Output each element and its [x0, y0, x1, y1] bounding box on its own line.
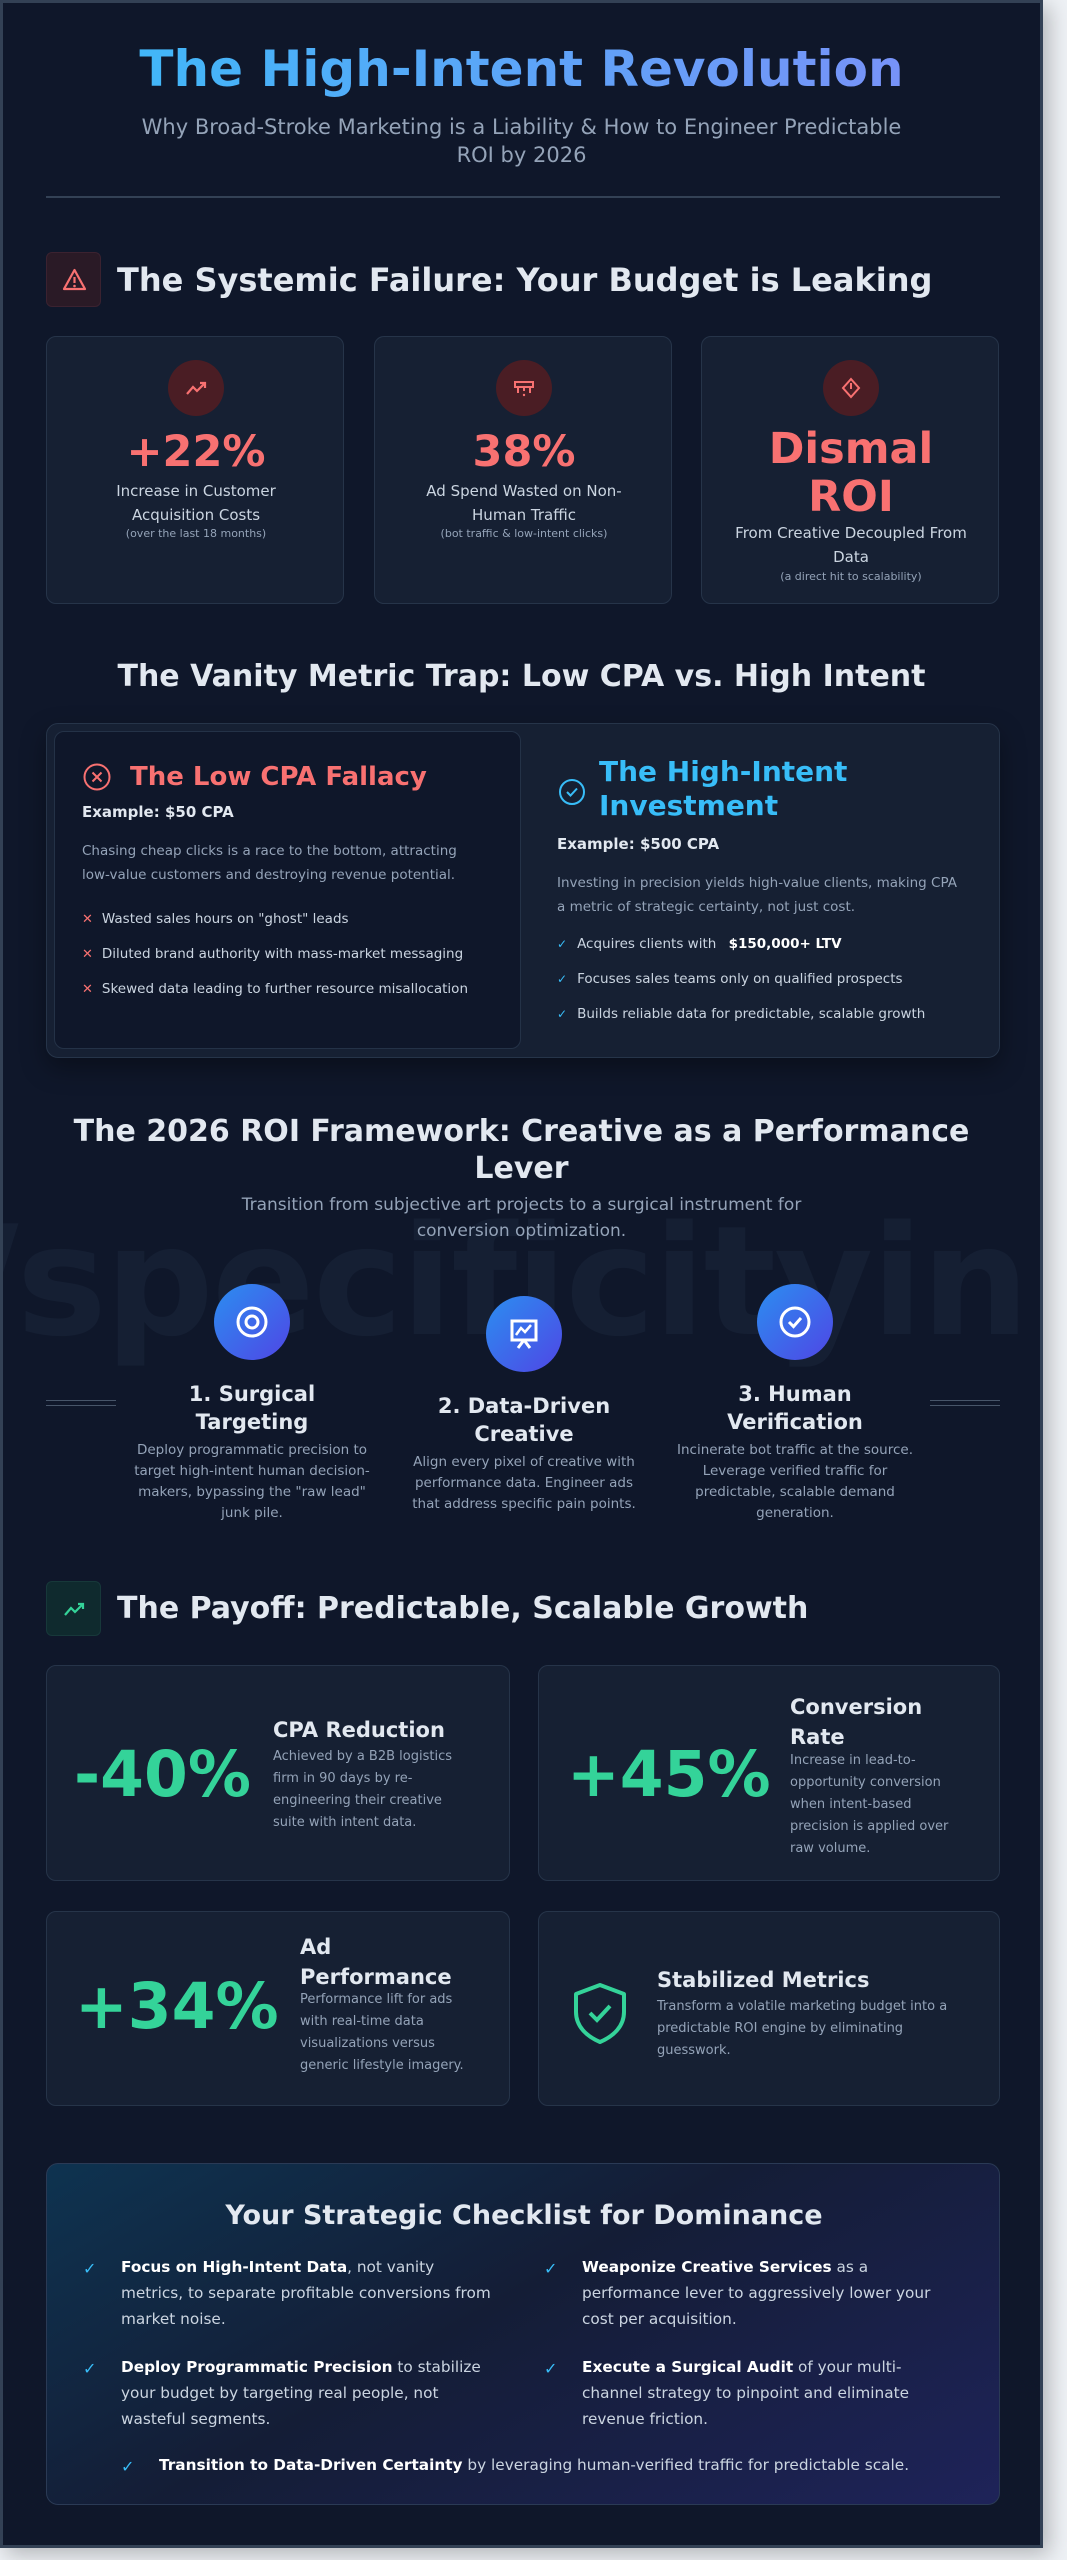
stat card 1: Increase in Customer Acquisition Costs [116, 482, 276, 524]
stat card 2: Ad Spend Wasted on Non-Human Traffic [426, 482, 622, 524]
section heading: payoff: The Payoff: Predictable, Scalable Growth [117, 1591, 808, 1626]
metric card: conversion: Increase in lead-to-opportunity conversion when intent-based precision is applied over raw volume. [790, 1753, 948, 1856]
panel: low CPA fallacy: Example: $50 CPA [82, 803, 234, 821]
section heading: systemic failure: The Systemic Failure: Your Budget is Leaking [117, 261, 932, 299]
step 2: Creative [474, 1422, 574, 1446]
stat card 3: Dismal [769, 424, 933, 474]
stat card 1 [46, 336, 344, 604]
stat card 1: +22% [127, 427, 265, 477]
checklist item 2: ✓ [544, 2259, 557, 2278]
panel: high intent investment: Investing in precision yields high-value clients, making CPA a metric of strategic certainty, not just cost. [557, 875, 957, 915]
step 3 [677, 1284, 913, 1521]
step 1: 1. Surgical [189, 1382, 315, 1406]
panel: low CPA fallacy: The Low CPA Fallacy [130, 762, 427, 792]
checklist item 2: Weaponize Creative Services as a performance lever to aggressively lower your cost per acquisition. [582, 2258, 930, 2328]
stat card 3: ROI [808, 472, 894, 522]
metric card: ad performance [46, 1911, 510, 2106]
checklist item 3: ✓ [83, 2359, 96, 2378]
panel: strategic checklist [46, 2163, 1000, 2505]
icon: trend up green [46, 1581, 101, 1636]
icon: shield check [574, 1983, 626, 2044]
section heading: payoff [46, 1581, 808, 1636]
panel: low CPA fallacy: Chasing cheap clicks is a race to the bottom, attracting low-value customers and destroying revenue potential. [82, 843, 457, 883]
metric card: stabilized: Stabilized Metrics [657, 1968, 869, 1992]
section heading: ROI framework: The 2026 ROI Framework: Creative as a Performance Lever [74, 1114, 969, 1186]
step 2: 2. Data-Driven [438, 1394, 610, 1418]
metric card: conversion: Rate [790, 1725, 845, 1749]
icon: bot [496, 360, 552, 416]
check list: ✓ Builds reliable data for predictable, scalable growth [557, 1006, 925, 1022]
bullet list: ✕ Wasted sales hours on "ghost" leads [82, 911, 349, 927]
checklist item 1: ✓ [83, 2259, 96, 2278]
bullet list: ✕ Diluted brand authority with mass-market messaging [82, 946, 463, 962]
metric card: stabilized [538, 1911, 1000, 2106]
checklist item 3: Deploy Programmatic Precision to stabilize your budget by targeting real people, not wasteful segments. [121, 2358, 481, 2428]
stat card 2 [374, 336, 672, 604]
metric card: conversion [538, 1665, 1000, 1881]
section heading: vanity metric: The Vanity Metric Trap: Low CPA vs. High Intent [117, 659, 926, 694]
bullet list [82, 911, 468, 997]
icon: x circle [84, 764, 110, 790]
metric card: ad performance: Performance [300, 1965, 452, 1989]
step 1: Deploy programmatic precision to target high-intent human decision-makers, bypassing the "raw lead" junk pile. [134, 1442, 370, 1521]
stat card 3: (a direct hit to scalability) [780, 570, 922, 583]
checklist item 5: Transition to Data-Driven Certainty by leveraging human-verified traffic for predictable scale. [159, 2456, 909, 2474]
check list [557, 936, 925, 1022]
step 3: Incinerate bot traffic at the source. Leverage verified traffic for predictable, scalable demand generation. [677, 1442, 913, 1521]
checklist item 4: Execute a Surgical Audit of your multi-channel strategy to pinpoint and eliminate revenue friction. [582, 2358, 909, 2428]
metric card: conversion: +45% [567, 1738, 771, 1811]
icon: presentation chart [486, 1296, 562, 1372]
bullet list: ✕ Skewed data leading to further resource misallocation [82, 981, 468, 997]
step 1 [134, 1284, 370, 1521]
step 1: Targeting [196, 1410, 308, 1434]
metric card: ad performance: +34% [75, 1970, 279, 2043]
icon: check circle [559, 779, 585, 805]
panel: comparison [46, 723, 1000, 1058]
title: The High-Intent Revolution [139, 40, 904, 98]
metric card: conversion: Conversion [790, 1695, 922, 1719]
checklist item 5: ✓ [121, 2457, 134, 2476]
metric card: CPA: CPA Reduction [273, 1718, 445, 1742]
checklist item 1: Focus on High-Intent Data, not vanity metrics, to separate profitable conversions from market noise. [121, 2258, 491, 2328]
icon: check badge [757, 1284, 833, 1360]
stat card 2: 38% [473, 427, 575, 477]
icon: trend up [168, 360, 224, 416]
metric card: CPA [46, 1665, 510, 1881]
stat card 2: (bot traffic & low-intent clicks) [441, 527, 607, 540]
metric card: stabilized: Transform a volatile marketing budget into a predictable ROI engine by eliminating guesswork. [657, 1999, 947, 2058]
icon: diamond [823, 360, 879, 416]
metric card: CPA: -40% [74, 1738, 251, 1811]
check list: ✓ Focuses sales teams only on qualified prospects [557, 971, 903, 987]
metric card: CPA: Achieved by a B2B logistics firm in 90 days by re-engineering their creative suite with intent data. [273, 1749, 452, 1830]
subtitle: Why Broad-Stroke Marketing is a Liability & How to Engineer Predictable ROI by 2026 [142, 115, 901, 167]
icon: eye [214, 1284, 290, 1360]
panel: strategic checklist: Your Strategic Checklist for Dominance [225, 2200, 823, 2231]
panel: high intent investment: Investment [599, 789, 778, 822]
panel: high intent investment: The High-Intent [599, 755, 847, 788]
section heading: systemic failure [46, 252, 932, 307]
metric card: ad performance: Performance lift for ads with real-time data visualizations versus generic lifestyle imagery. [300, 1992, 464, 2073]
step 2 [412, 1296, 636, 1512]
icon: warning [46, 252, 101, 307]
stat card 3: From Creative Decoupled From Data [735, 524, 967, 566]
check list: ✓ Acquires clients with $150,000+ LTV [557, 936, 842, 952]
step 2: Align every pixel of creative with performance data. Engineer ads that address specific pain points. [412, 1454, 636, 1512]
checklist item 4: ✓ [544, 2359, 557, 2378]
metric card: ad performance: Ad [300, 1935, 331, 1959]
panel: high intent investment: Example: $500 CPA [557, 835, 719, 853]
framework subtitle: Transition from subjective art projects to a surgical instrument for conversion optimization. [242, 1195, 801, 1241]
step 3: 3. Human [738, 1382, 852, 1406]
stat card 3 [701, 336, 999, 604]
panel: high intent investment [557, 755, 957, 1022]
stat card 1: (over the last 18 months) [126, 527, 266, 540]
step 3: Verification [727, 1410, 863, 1434]
panel: low CPA fallacy [54, 731, 521, 1049]
